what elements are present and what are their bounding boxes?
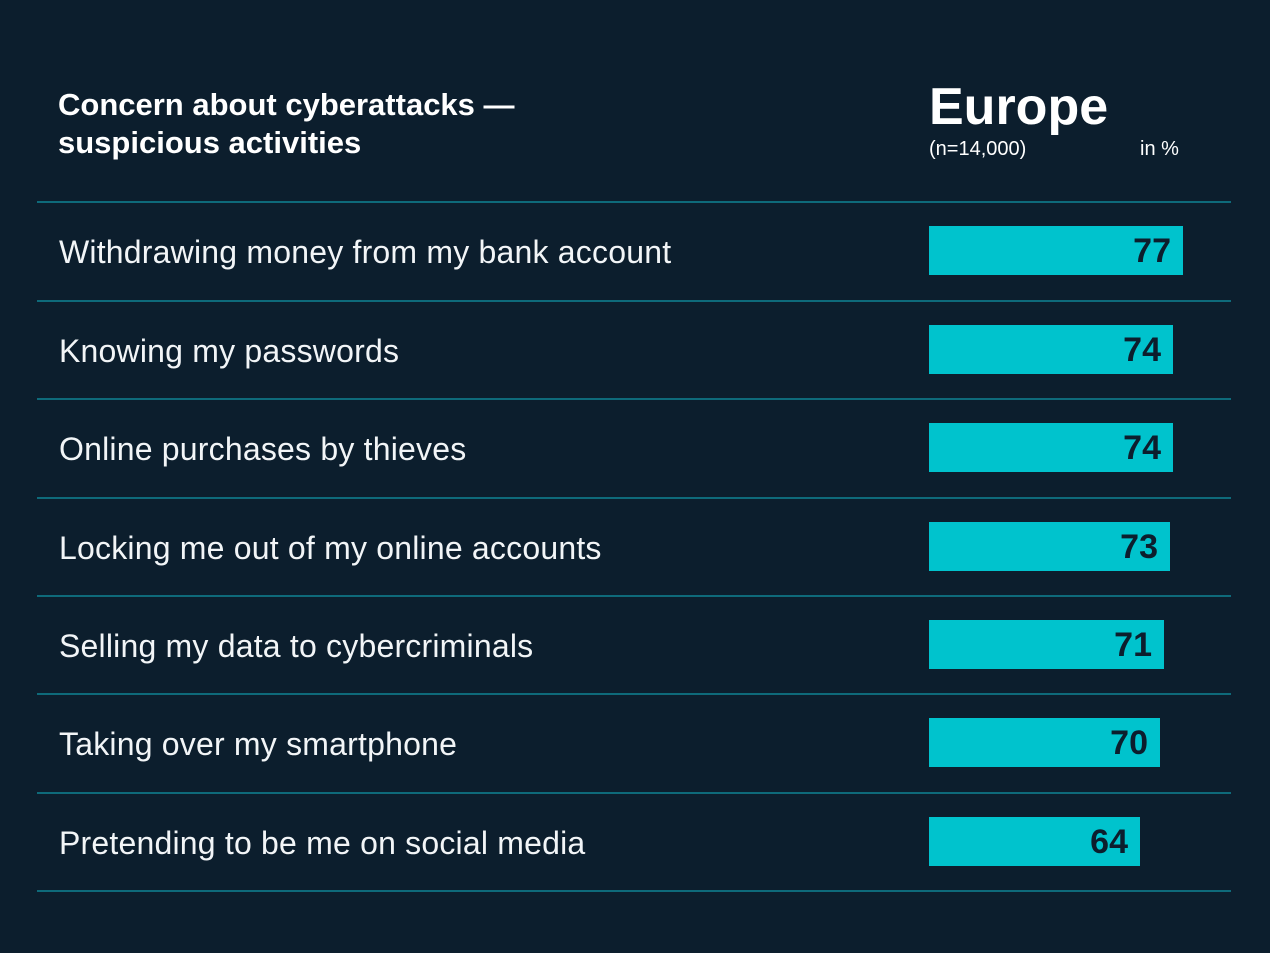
- bar 3: 74: [1123, 429, 1161, 467]
- row 3 label: Online purchases by thieves: [59, 431, 466, 467]
- row 2 label: Knowing my passwords: [59, 333, 399, 369]
- sample size: (n=14,000): [929, 138, 1026, 160]
- bar 6: 70: [1110, 724, 1148, 762]
- bar 2: 74: [1123, 331, 1161, 369]
- bar 1: [929, 226, 1183, 275]
- title: Concern about cyberattacks —: [58, 87, 515, 122]
- bar 5: 71: [1114, 626, 1152, 664]
- row 1 label: Withdrawing money from my bank account: [59, 234, 671, 270]
- title: suspicious activities: [58, 125, 361, 160]
- row 4 label: Locking me out of my online accounts: [59, 530, 602, 566]
- heading: Europe: Europe: [929, 78, 1108, 136]
- bar 5: [929, 620, 1164, 669]
- bar 6: [929, 718, 1160, 767]
- row 6 label: Taking over my smartphone: [59, 726, 457, 762]
- row 5 label: Selling my data to cybercriminals: [59, 628, 533, 664]
- bar 4: 73: [1120, 528, 1158, 566]
- bar 3: [929, 423, 1173, 472]
- bar 1: 77: [1133, 232, 1171, 270]
- unit: in %: [1140, 138, 1179, 160]
- bar 4: [929, 522, 1170, 571]
- row 7 label: Pretending to be me on social media: [59, 825, 585, 861]
- bar 7: [929, 817, 1140, 866]
- bar 2: [929, 325, 1173, 374]
- region heading: [929, 78, 1179, 160]
- title: [58, 87, 515, 160]
- bar 7: 64: [1090, 823, 1128, 861]
